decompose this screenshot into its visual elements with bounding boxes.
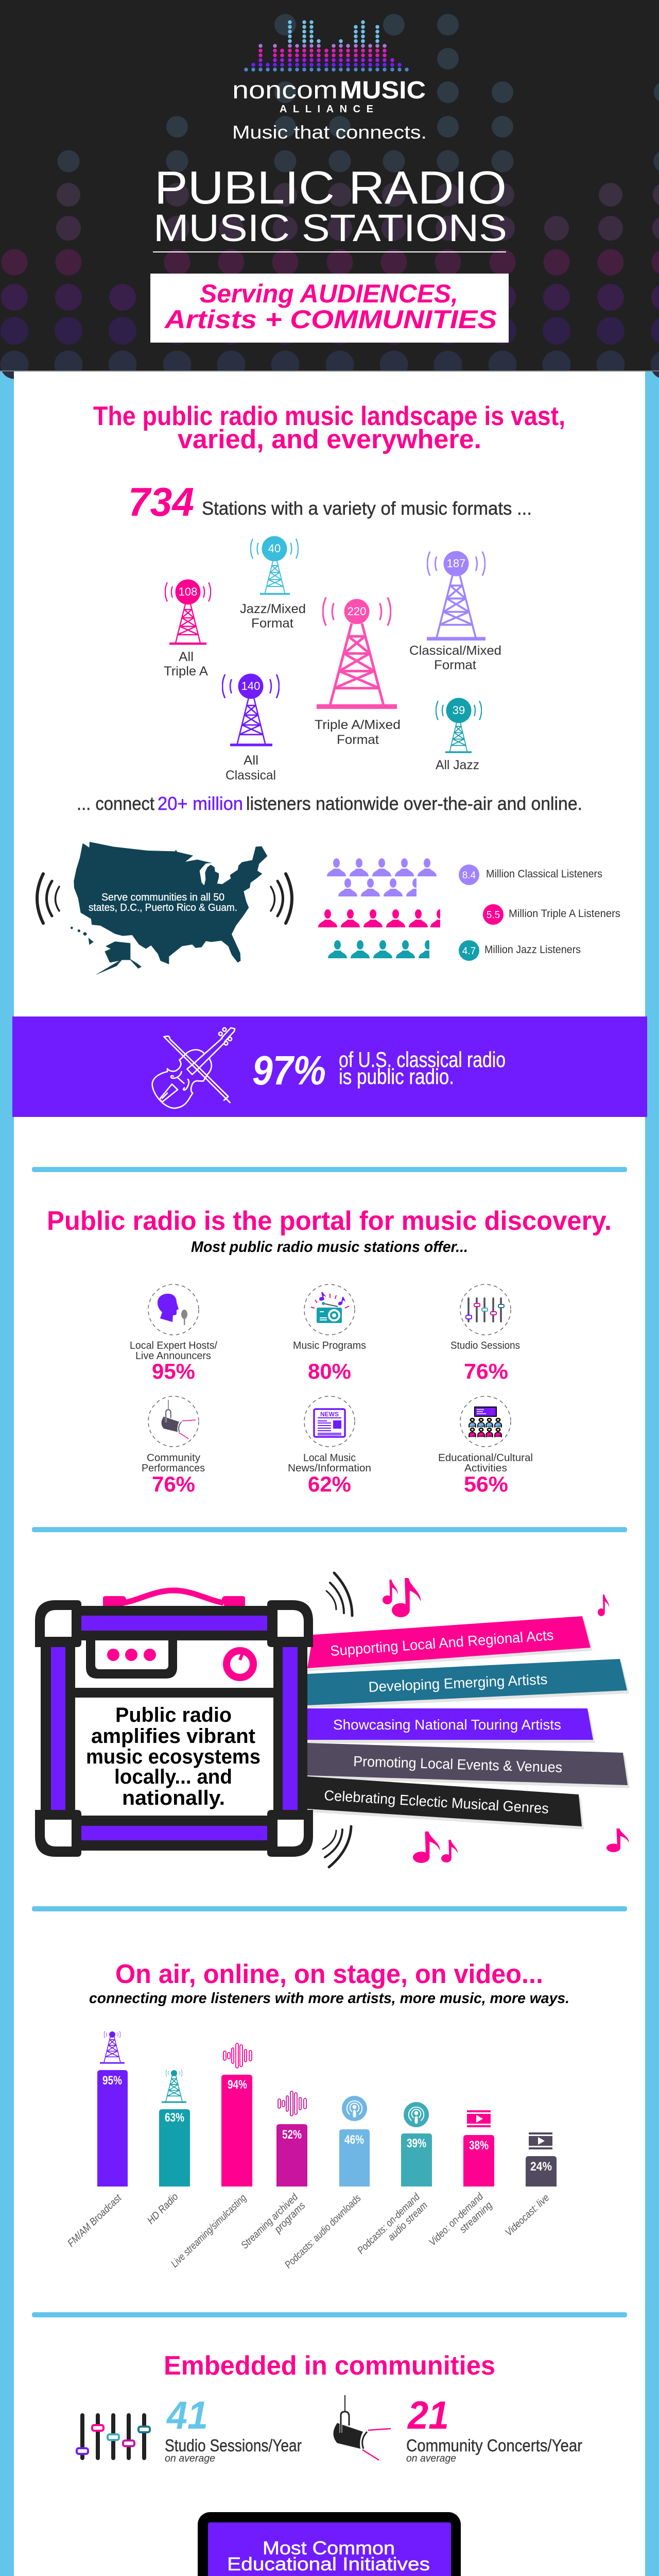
panel: header xyxy=(0,0,659,371)
bar: video on demand xyxy=(463,2135,494,2187)
axis labels: HD Radio xyxy=(145,2191,181,2227)
icon: music notes xyxy=(383,1578,629,1863)
tower: all triple a xyxy=(164,579,211,679)
panel: discovery xyxy=(47,1206,612,1496)
item: educational activities: Activities xyxy=(464,1463,507,1474)
stat: studio sessions: 41 xyxy=(166,2394,208,2437)
item: studio sessions: 76% xyxy=(464,1359,508,1383)
map caption: Serve communities in all 50 xyxy=(101,892,224,903)
item: expert hosts: 95% xyxy=(152,1359,195,1383)
bar: live streaming xyxy=(221,2075,252,2187)
tower: classical mixed xyxy=(409,551,501,672)
stat caption: is public radio. xyxy=(339,1064,454,1089)
tower: triple a mixed: 220 xyxy=(348,605,366,618)
ribbon: emerging artists: Developing Emerging Artists xyxy=(368,1671,548,1695)
bar: fm am xyxy=(97,2070,128,2187)
bar: hd radio xyxy=(159,2109,190,2187)
reach statement: 20+ million xyxy=(158,793,243,814)
heading xyxy=(93,401,565,454)
title: PUBLIC RADIO xyxy=(154,162,507,214)
tower: jazz mixed: Format xyxy=(251,616,293,631)
bar: fm am: 95% xyxy=(102,2074,122,2088)
station count: 734 xyxy=(128,479,194,524)
classical listeners xyxy=(327,858,602,896)
axis labels: Streaming archived xyxy=(239,2191,301,2251)
logo wordmark: ALLIANCE xyxy=(280,104,373,115)
bar: videocast: 24% xyxy=(530,2160,552,2174)
stat: community concerts: on average xyxy=(406,2453,456,2464)
item: community performances: 76% xyxy=(152,1472,195,1496)
axis labels: streaming xyxy=(457,2199,494,2235)
amplifier text xyxy=(86,1704,261,1809)
station count: Stations with a variety of music formats ... xyxy=(202,498,532,519)
map caption xyxy=(89,892,237,913)
logo equalizer xyxy=(239,18,414,70)
subtitle box: Artists + COMMUNITIES xyxy=(164,305,497,334)
bar: hd radio: 63% xyxy=(165,2111,184,2125)
amplifier text: music ecosystems xyxy=(86,1745,261,1768)
bar: podcast streams xyxy=(401,2133,432,2187)
item: local music news: News/Information xyxy=(288,1463,371,1474)
bar: podcast downloads: 46% xyxy=(344,2133,364,2147)
reach statement xyxy=(77,793,582,814)
classical listeners: Million Classical Listeners xyxy=(486,868,602,880)
icons above bars xyxy=(100,2031,552,2149)
item: local music news: NEWS xyxy=(320,1411,339,1418)
stat: community concerts xyxy=(406,2394,582,2464)
axis labels xyxy=(65,2191,551,2271)
item: music programs: Music Programs xyxy=(293,1340,366,1351)
item: local music news xyxy=(288,1396,371,1496)
axis labels: Videocast: live xyxy=(503,2192,551,2239)
tower: triple a mixed xyxy=(315,597,401,747)
heading: varied, and everywhere. xyxy=(178,425,481,454)
map caption: states, D.C., Puerto Rico & Guam. xyxy=(89,902,237,913)
sound arcs top xyxy=(326,1573,352,1616)
jazz listeners xyxy=(328,940,581,961)
tower: jazz mixed: Jazz/Mixed xyxy=(240,602,306,616)
stat: studio sessions xyxy=(165,2394,302,2464)
bar: podcast downloads xyxy=(339,2129,370,2187)
ribbon: emerging artists xyxy=(307,1659,629,1708)
ribbon: touring artists: Showcasing National Touring Artists xyxy=(333,1717,561,1733)
icon: amplifier xyxy=(35,1590,313,1857)
axis labels: Podcasts: on-demand xyxy=(355,2191,422,2257)
item: expert hosts: Local Expert Hosts/ xyxy=(130,1340,217,1351)
bar: video on demand: 38% xyxy=(469,2139,489,2153)
ribbon: local events xyxy=(307,1743,630,1788)
icon: violin and bow xyxy=(152,1028,235,1108)
item: local music news: 62% xyxy=(308,1472,351,1496)
item: community performances: Performances xyxy=(142,1463,205,1474)
heading: Public radio is the portal for music discovery. xyxy=(47,1206,612,1236)
amplifier corners xyxy=(35,1600,313,1857)
reach statement: listeners nationwide over-the-air and online. xyxy=(246,793,582,814)
logo wordmark: noncom xyxy=(232,77,338,104)
bar: videocast xyxy=(526,2156,557,2187)
item: educational activities: Educational/Cultural xyxy=(438,1452,533,1464)
tower: all classical xyxy=(222,674,279,783)
ribbon: local events: Promoting Local Events & Venues xyxy=(353,1753,563,1775)
station count xyxy=(128,479,532,524)
triple a listeners: Million Triple A Listeners xyxy=(509,908,620,920)
axis labels: Live streaming/simulcasting xyxy=(169,2192,249,2270)
ribbon: supporting local: Supporting Local And Regional Acts xyxy=(330,1627,554,1659)
triple a listeners xyxy=(318,904,620,927)
panel: platforms chart xyxy=(65,1959,569,2271)
bar: podcast streams: 39% xyxy=(407,2137,426,2150)
subheading: Most public radio music stations offer... xyxy=(191,1239,468,1256)
tower: all classical: 140 xyxy=(241,680,260,692)
jazz listeners: 4.7 xyxy=(462,946,476,957)
stat: community concerts: 21 xyxy=(407,2394,449,2437)
tower: all classical: Classical xyxy=(226,768,276,783)
heading: Embedded in communities xyxy=(164,2351,495,2381)
screen title xyxy=(227,2537,430,2574)
tower: all triple a: All xyxy=(179,650,194,664)
stat: studio sessions: on average xyxy=(165,2453,215,2464)
item: educational activities: 56% xyxy=(464,1472,508,1496)
panel: educational initiatives screen xyxy=(198,2512,461,2576)
classical listeners: 8.4 xyxy=(462,870,476,881)
stat caption xyxy=(339,1047,506,1089)
heading: On air, online, on stage, on video... xyxy=(115,1959,543,1989)
item: community performances xyxy=(142,1396,205,1496)
stat: 97% xyxy=(252,1047,326,1093)
panel: amplifier and ribbons xyxy=(35,1573,630,1867)
tower: all classical: All xyxy=(244,753,258,768)
triple a listeners: 5.5 xyxy=(487,910,500,921)
tower: jazz mixed: 40 xyxy=(268,542,281,555)
map of the united states xyxy=(71,842,267,975)
reach statement: ... connect xyxy=(77,793,154,814)
broadcast arcs right xyxy=(271,874,292,923)
item: studio sessions: Studio Sessions xyxy=(450,1340,520,1351)
tower: all jazz xyxy=(436,698,481,772)
tower: classical mixed: Classical/Mixed xyxy=(409,643,501,658)
subheading: connecting more listeners with more artists, more music, more ways. xyxy=(89,1990,569,2007)
amplifier text: amplifies vibrant xyxy=(91,1725,255,1748)
item: expert hosts xyxy=(130,1284,217,1383)
amplifier text: Public radio xyxy=(115,1704,232,1726)
tower: all jazz: 39 xyxy=(453,704,465,717)
item: music programs xyxy=(293,1284,366,1383)
bar: archived: 52% xyxy=(282,2128,302,2142)
tower: all triple a: 108 xyxy=(179,585,197,598)
axis labels: audio stream xyxy=(386,2200,430,2243)
axis labels: Video: on-demand xyxy=(427,2191,486,2248)
axis labels: Podcasts: audio downloads xyxy=(283,2193,363,2271)
item: community performances: Community xyxy=(147,1452,200,1464)
amplifier text: locally... and xyxy=(114,1766,232,1788)
item: expert hosts: Live Announcers xyxy=(135,1350,211,1362)
bar chart xyxy=(97,2070,557,2187)
panel: communities xyxy=(77,2351,582,2576)
stat caption: of U.S. classical radio xyxy=(339,1047,506,1072)
logo wordmark xyxy=(232,77,426,115)
subtitle box xyxy=(150,274,509,343)
heading: The public radio music landscape is vast, xyxy=(93,401,565,431)
tower: classical mixed: Format xyxy=(434,658,476,672)
sound arcs bottom xyxy=(323,1826,351,1867)
tower: classical mixed: 187 xyxy=(447,557,465,570)
tower: all triple a: Triple A xyxy=(164,664,208,679)
title: MUSIC STATIONS xyxy=(153,207,507,249)
axis labels: programs xyxy=(272,2200,308,2235)
logo wordmark: MUSIC xyxy=(340,77,426,104)
screen title: Most Common xyxy=(263,2537,395,2558)
ribbon: touring artists xyxy=(307,1708,595,1743)
broadcast arcs left xyxy=(37,874,59,923)
title xyxy=(153,162,507,252)
ribbon: supporting local xyxy=(307,1616,593,1671)
icon: faders xyxy=(77,2415,150,2458)
tower: all jazz: All Jazz xyxy=(436,758,479,772)
ribbon: eclectic genres xyxy=(307,1776,584,1829)
item: studio sessions xyxy=(450,1284,520,1383)
background equalizer dots xyxy=(14,25,659,365)
tower: jazz mixed xyxy=(240,536,306,631)
tower: triple a mixed: Triple A/Mixed xyxy=(315,718,401,732)
tower: triple a mixed: Format xyxy=(337,733,379,747)
tagline: Music that connects. xyxy=(232,122,427,143)
item: music programs: 80% xyxy=(308,1359,351,1383)
screen title: Educational Initiatives xyxy=(227,2553,430,2574)
item: local music news: Local Music xyxy=(303,1452,356,1464)
stat: community concerts: Community Concerts/Year xyxy=(406,2436,582,2455)
bar: archived xyxy=(276,2124,307,2187)
icon: spotlight xyxy=(334,2395,391,2460)
amplifier text: nationally. xyxy=(122,1787,225,1809)
panel: classical band xyxy=(12,1016,647,1117)
axis labels: FM/AM Broadcast xyxy=(65,2192,124,2249)
jazz listeners: Million Jazz Listeners xyxy=(484,944,581,956)
bar: live streaming: 94% xyxy=(228,2078,247,2092)
item: educational activities xyxy=(438,1396,533,1496)
ribbon: eclectic genres: Celebrating Eclectic Musical Genres xyxy=(324,1787,549,1817)
subtitle box: Serving AUDIENCES, xyxy=(200,279,458,308)
panel: landscape xyxy=(37,401,620,975)
stat: studio sessions: Studio Sessions/Year xyxy=(165,2436,302,2455)
